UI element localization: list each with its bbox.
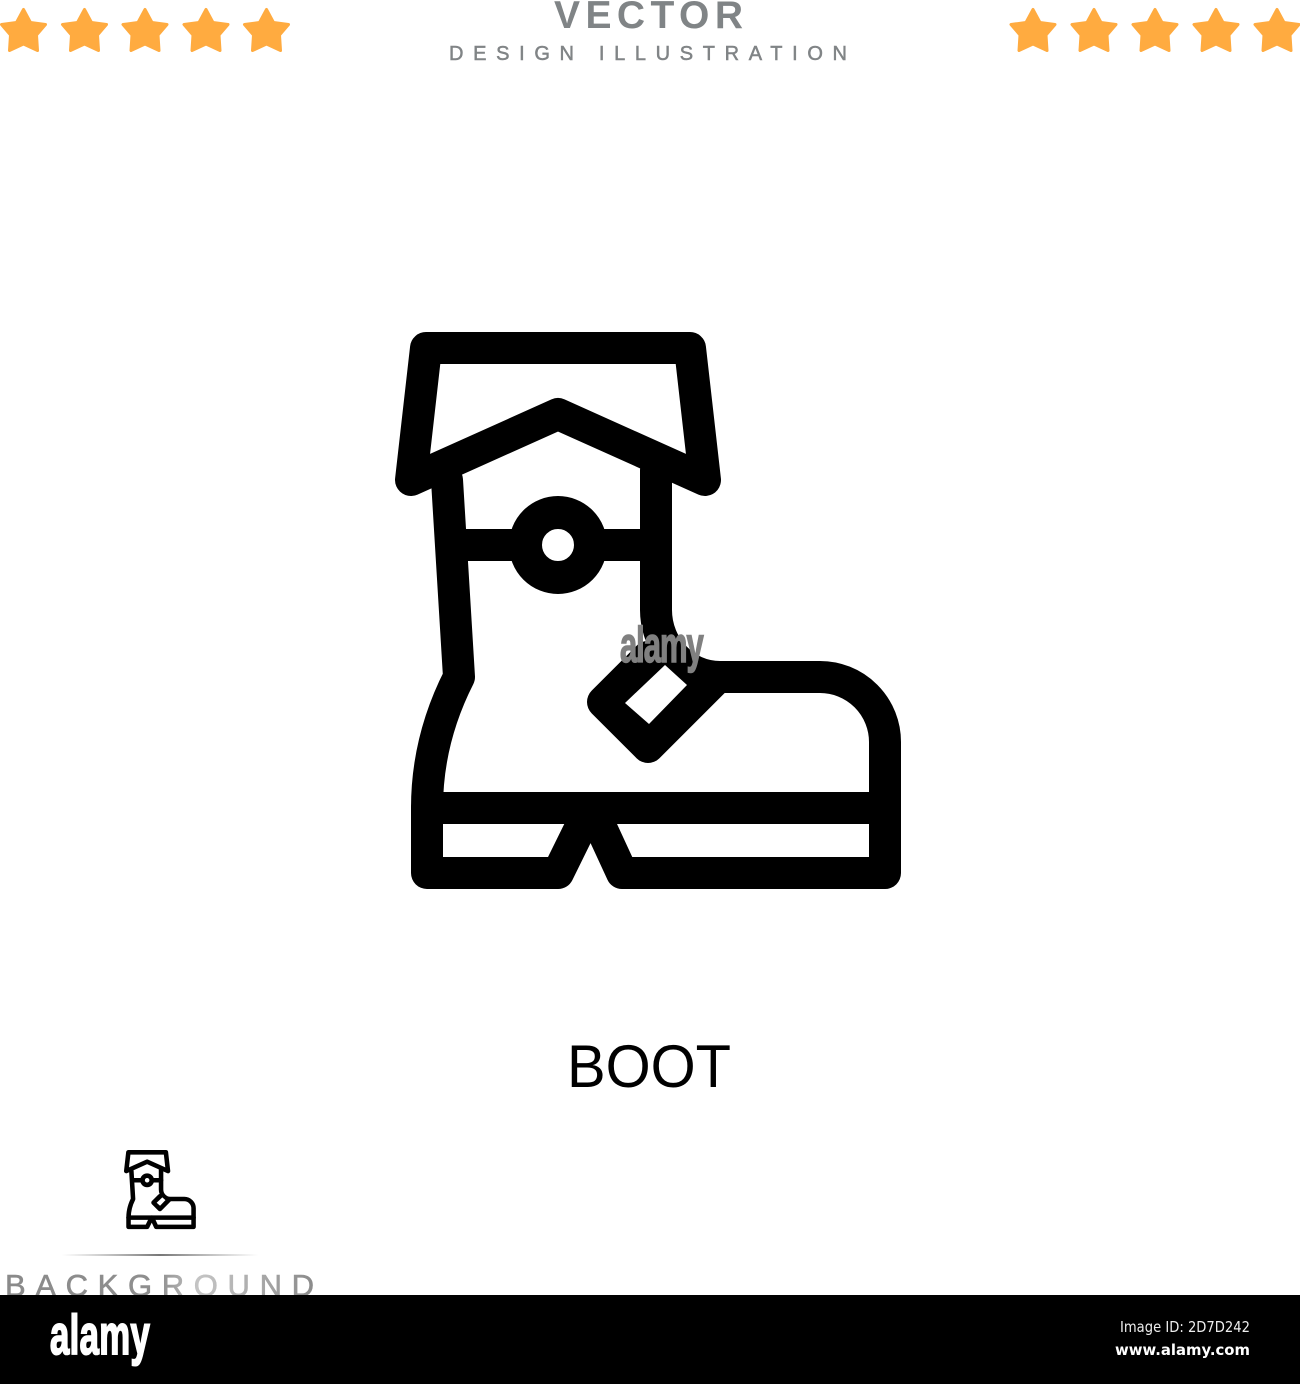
label: BACKGROUND: BACKGROUND — [5, 1268, 314, 1303]
star rating: right — [1011, 10, 1299, 50]
footer text: website: www.alamy.com — [1115, 1341, 1250, 1359]
subheading: DESIGN ILLUSTRATION: DESIGN ILLUSTRATION — [449, 43, 847, 65]
watermark: alamy over boot: alamy — [620, 616, 704, 673]
footer text: image ID: Image ID: 2D7D242 — [1120, 1318, 1250, 1336]
title: BOOT: BOOT — [567, 1033, 731, 1100]
icon: small boot — [126, 1152, 194, 1227]
star rating: left — [2, 10, 288, 50]
icon: large boot — [411, 348, 885, 873]
footer band — [0, 1295, 1300, 1384]
footer logo: alamy: alamy — [50, 1304, 150, 1366]
